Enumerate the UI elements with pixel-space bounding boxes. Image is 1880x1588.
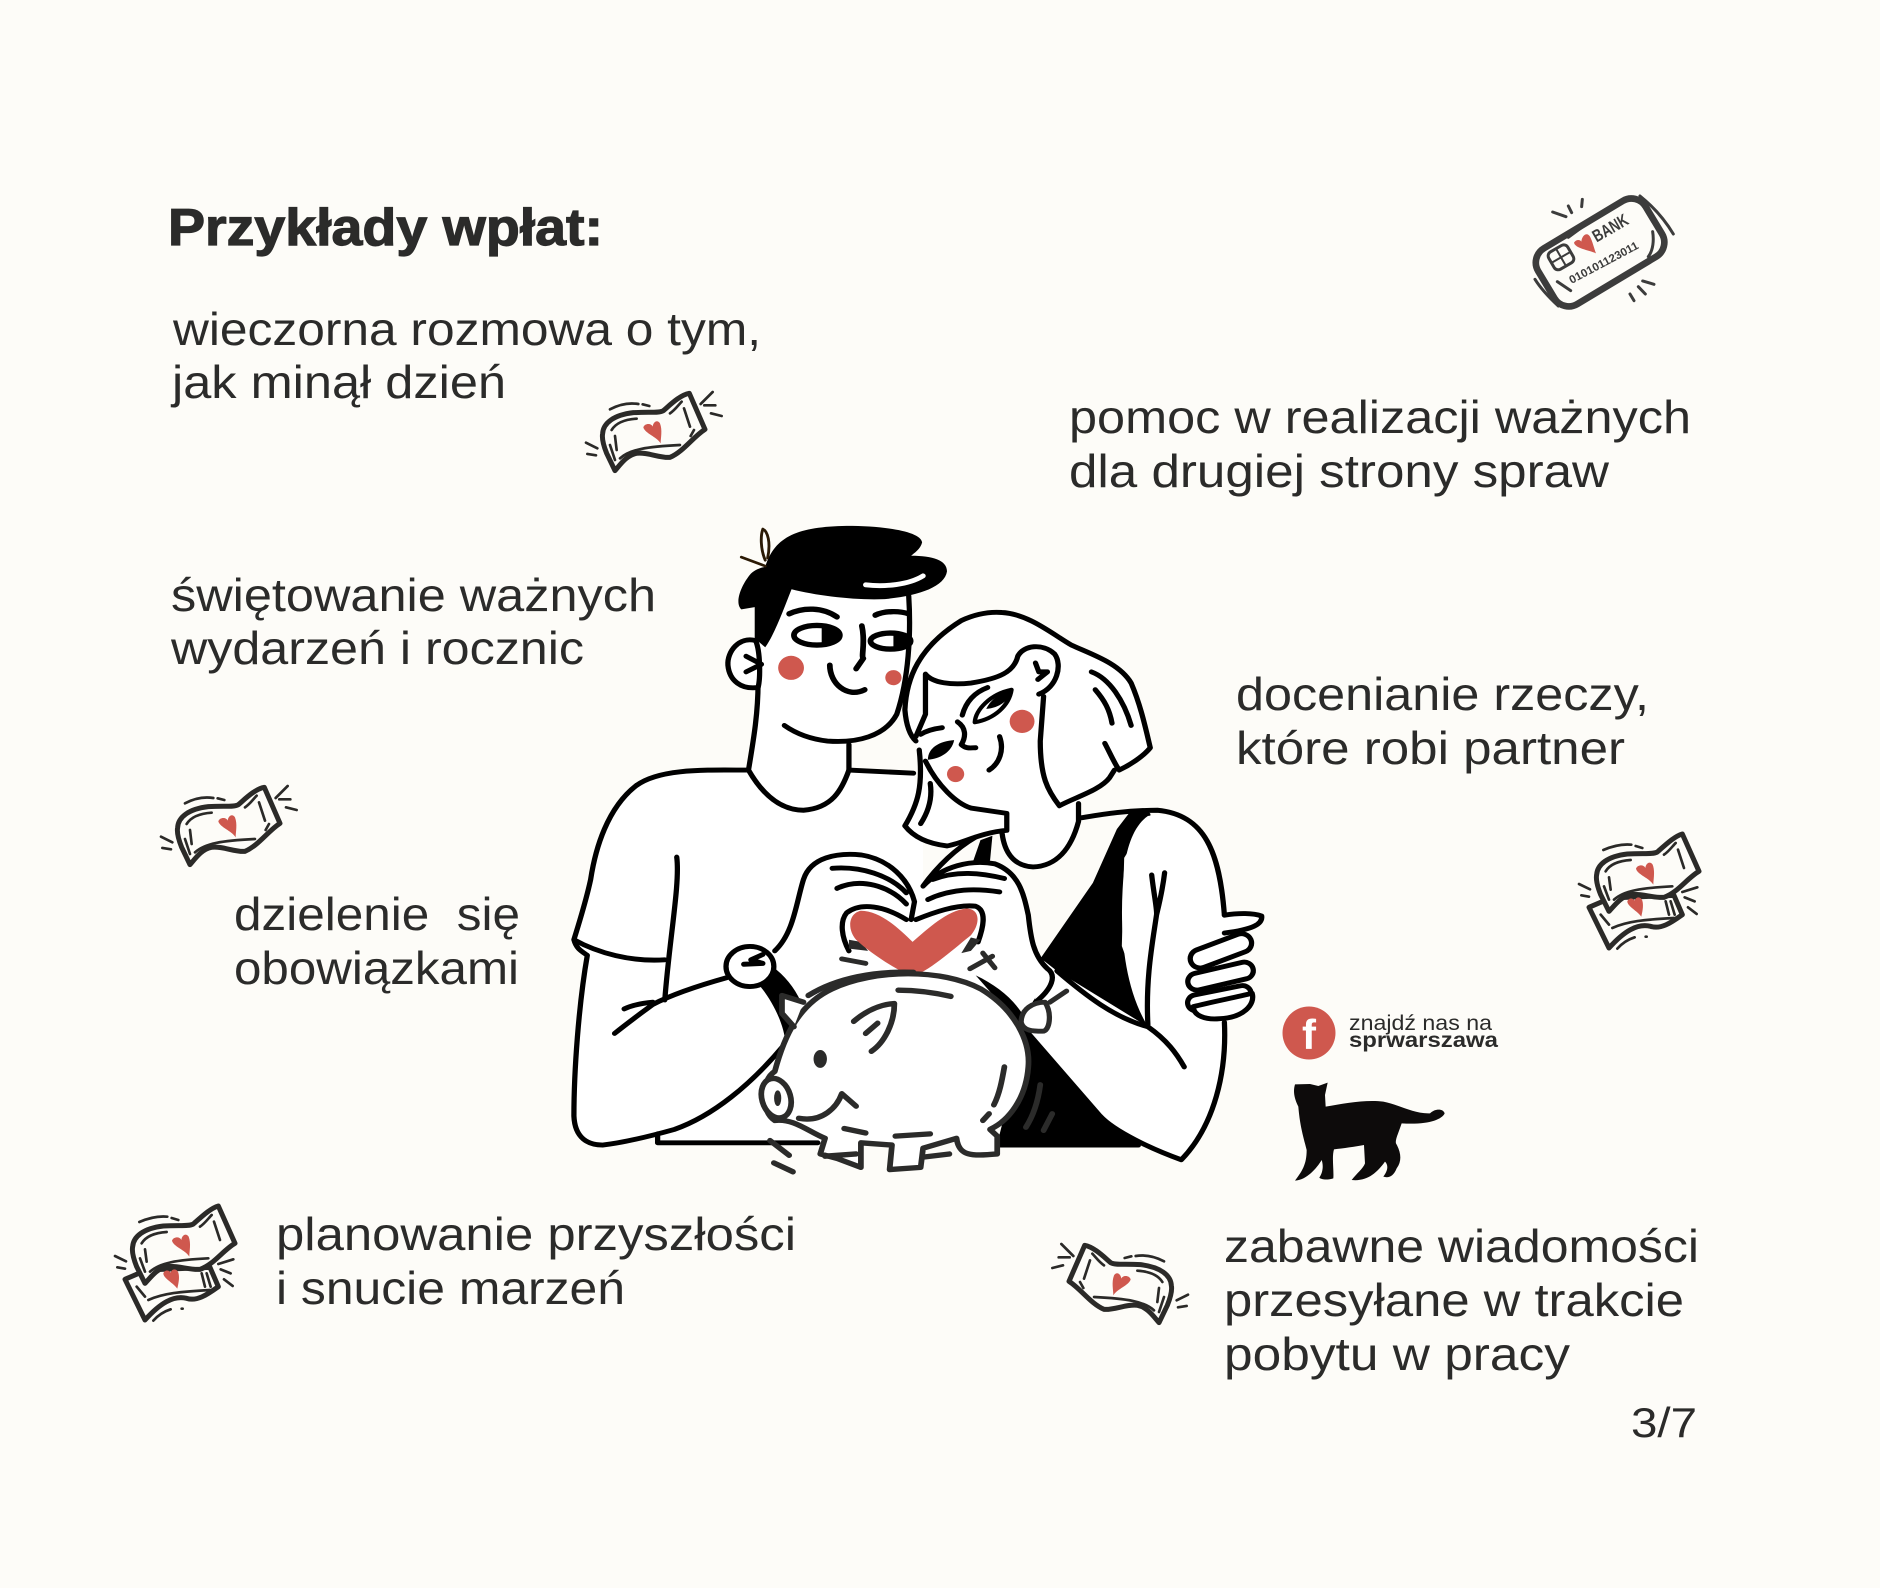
text block: appreciating: które robi partner <box>1236 722 1625 774</box>
text block: sharing duties: obowiązkami <box>234 942 519 994</box>
text block: funny messages: zabawne wiadomości <box>1224 1220 1699 1272</box>
watch <box>726 946 801 1042</box>
icon: double banknote right <box>1579 834 1699 949</box>
text block: evening conversation <box>170 303 761 408</box>
illustration: couple with piggy bank <box>574 526 1262 1172</box>
text block: planning the future: planowanie przyszłości <box>276 1208 796 1260</box>
text block: celebrating: wydarzeń i rocznic <box>170 622 584 674</box>
icon: banknote top <box>586 392 722 471</box>
icon: facebook circle <box>1282 1006 1336 1060</box>
text block: planning the future: i snucie marzeń <box>276 1262 625 1314</box>
text block: funny messages <box>1224 1220 1699 1380</box>
icon: facebook circle: f <box>1302 1011 1317 1058</box>
text block: funny messages: przesyłane w trakcie <box>1224 1274 1684 1326</box>
text block: appreciating <box>1236 668 1649 774</box>
man's hair <box>738 526 947 647</box>
heart <box>850 908 978 977</box>
text: facebook handle: znajdź nas na <box>1349 1012 1492 1035</box>
text block: evening conversation: jak minął dzień <box>170 356 506 408</box>
icon: double banknote left <box>115 1206 235 1321</box>
text block: funny messages: pobytu w pracy <box>1224 1328 1570 1380</box>
text block: help with important matters: dla drugiej strony spraw <box>1069 445 1610 497</box>
text block: celebrating <box>170 569 656 674</box>
man's torso and arm <box>574 770 923 1145</box>
text block: sharing duties: dzielenie się <box>234 888 520 940</box>
text block: appreciating: docenianie rzeczy, <box>1236 668 1649 720</box>
text: facebook handle <box>1349 1012 1498 1052</box>
text block: help with important matters <box>1069 391 1691 497</box>
icon: banknote left <box>161 786 297 865</box>
woman's black top <box>1000 815 1148 1145</box>
text block: evening conversation: wieczorna rozmowa o tym, <box>172 303 761 355</box>
icon: bank card <box>1530 192 1673 313</box>
piggy bank <box>757 972 1052 1172</box>
icon: bank card: BANK <box>1589 209 1632 246</box>
text block: help with important matters: pomoc w realizacji ważnych <box>1069 391 1691 443</box>
title: Przykłady wpłat: <box>168 199 603 257</box>
text: facebook handle: sprwarszawa <box>1349 1029 1498 1052</box>
text block: sharing duties <box>234 888 520 994</box>
text block: celebrating: świętowanie ważnych <box>171 569 656 621</box>
text block: planning the future <box>276 1208 796 1314</box>
icon: black cat <box>1294 1083 1445 1181</box>
page number: 3/7 <box>1631 1399 1697 1446</box>
woman's right hand details <box>1021 914 1262 1031</box>
icon: banknote bottom <box>1052 1244 1188 1323</box>
woman's head and hair <box>905 612 1150 867</box>
hands forming heart <box>775 837 1052 1009</box>
man's head <box>728 589 911 810</box>
icon: bank card: 010101123011 <box>1567 240 1641 287</box>
woman's arm <box>1028 810 1225 1160</box>
